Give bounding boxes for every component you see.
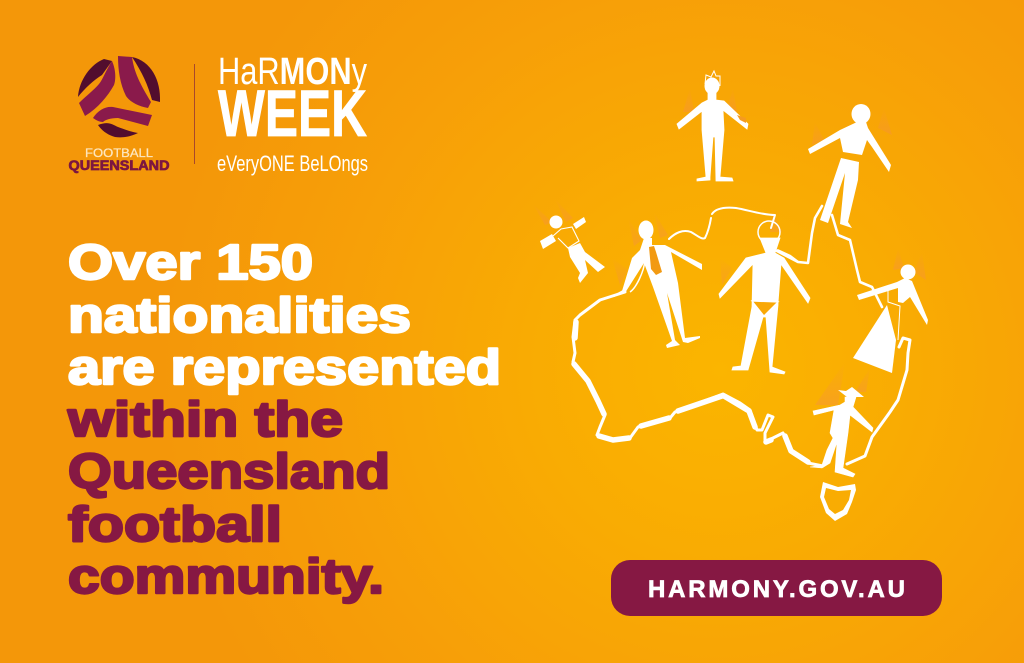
headline maroon line 6: football: [68, 498, 282, 552]
logo: Harmony Week: [217, 51, 368, 176]
outline: Cape York and Gulf: [775, 206, 882, 307]
outline: mainland coast: [573, 292, 823, 466]
small figure shirt: [553, 227, 579, 248]
small figure head: [550, 216, 562, 228]
headline white line 1: Over 150: [68, 236, 313, 290]
woman bodice outline: [888, 287, 900, 340]
man head: [638, 220, 654, 240]
woman body: [857, 278, 928, 325]
text: Football: FOOTBALL: [85, 146, 153, 160]
figure: centre man: [719, 221, 810, 374]
small figure limbs: [540, 217, 605, 283]
divider line: [194, 64, 195, 164]
figure: small figure on the left: [540, 216, 605, 283]
icon: football crest: [78, 56, 160, 137]
briefs: [752, 301, 778, 316]
faint rays behind the figures: [533, 88, 926, 405]
map of Australia: [573, 206, 910, 521]
figure: top man: [677, 71, 748, 181]
outline: cord from the centre figure to the tie figure: [614, 208, 775, 296]
headline white line 3: are represented: [68, 341, 501, 395]
centre man body: [719, 238, 810, 374]
figure: bottom man with hat: [810, 387, 873, 477]
headline maroon line 5: Queensland: [68, 445, 390, 499]
headline maroon line 4: within the: [67, 393, 343, 447]
button label: HARMONY.GOV.AU: [648, 576, 905, 603]
hat: [838, 387, 864, 397]
logo: Football Queensland: [68, 56, 170, 173]
text: Week: WEEK: [218, 76, 367, 150]
text: Harmony: HaRMONy: [218, 51, 367, 93]
outline: east coast: [847, 338, 910, 464]
outline: thick coast sections: [574, 322, 808, 462]
man body: [622, 238, 702, 348]
headline maroon line 7: community.: [68, 550, 384, 604]
button: harmony.gov.au: [611, 560, 942, 616]
tie: [649, 246, 662, 275]
dress: [853, 305, 896, 373]
centre man headband: [758, 221, 780, 243]
Tasmania: [820, 482, 856, 521]
headline white line 2: nationalities: [68, 289, 411, 343]
figure: right woman in dress: [853, 264, 928, 373]
bottom man body: [810, 397, 873, 477]
figure: upper right woman: [808, 104, 891, 228]
text: Queensland: QUEENSLAND: [68, 158, 170, 173]
figure: man with tie: [622, 220, 702, 348]
headline: [67, 236, 501, 604]
text: Everyone Belongs: eVeryONE BeLOngs: [217, 151, 368, 176]
